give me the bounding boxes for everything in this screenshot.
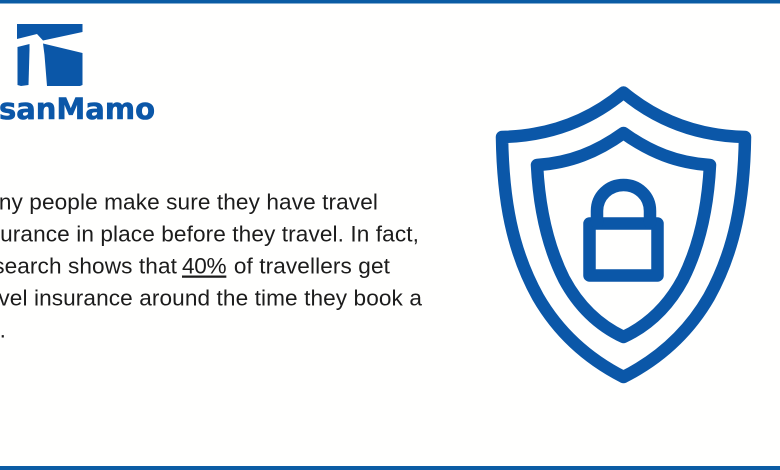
text block: research paragraph [0,190,422,342]
text block: research paragraph: of travellers get [234,254,391,278]
top border bar [0,0,780,4]
logo [0,24,155,126]
logo wordmark: sanMamo [0,92,155,126]
icon: shield with padlock [502,92,745,377]
icon: lighthouse [17,24,82,86]
padlock body [590,224,658,276]
shield outer outline [502,92,745,377]
shield inner outline [537,133,710,337]
padlock shackle [597,185,650,222]
bottom border bar [0,466,780,470]
text block: research paragraph: 40% [182,254,227,278]
